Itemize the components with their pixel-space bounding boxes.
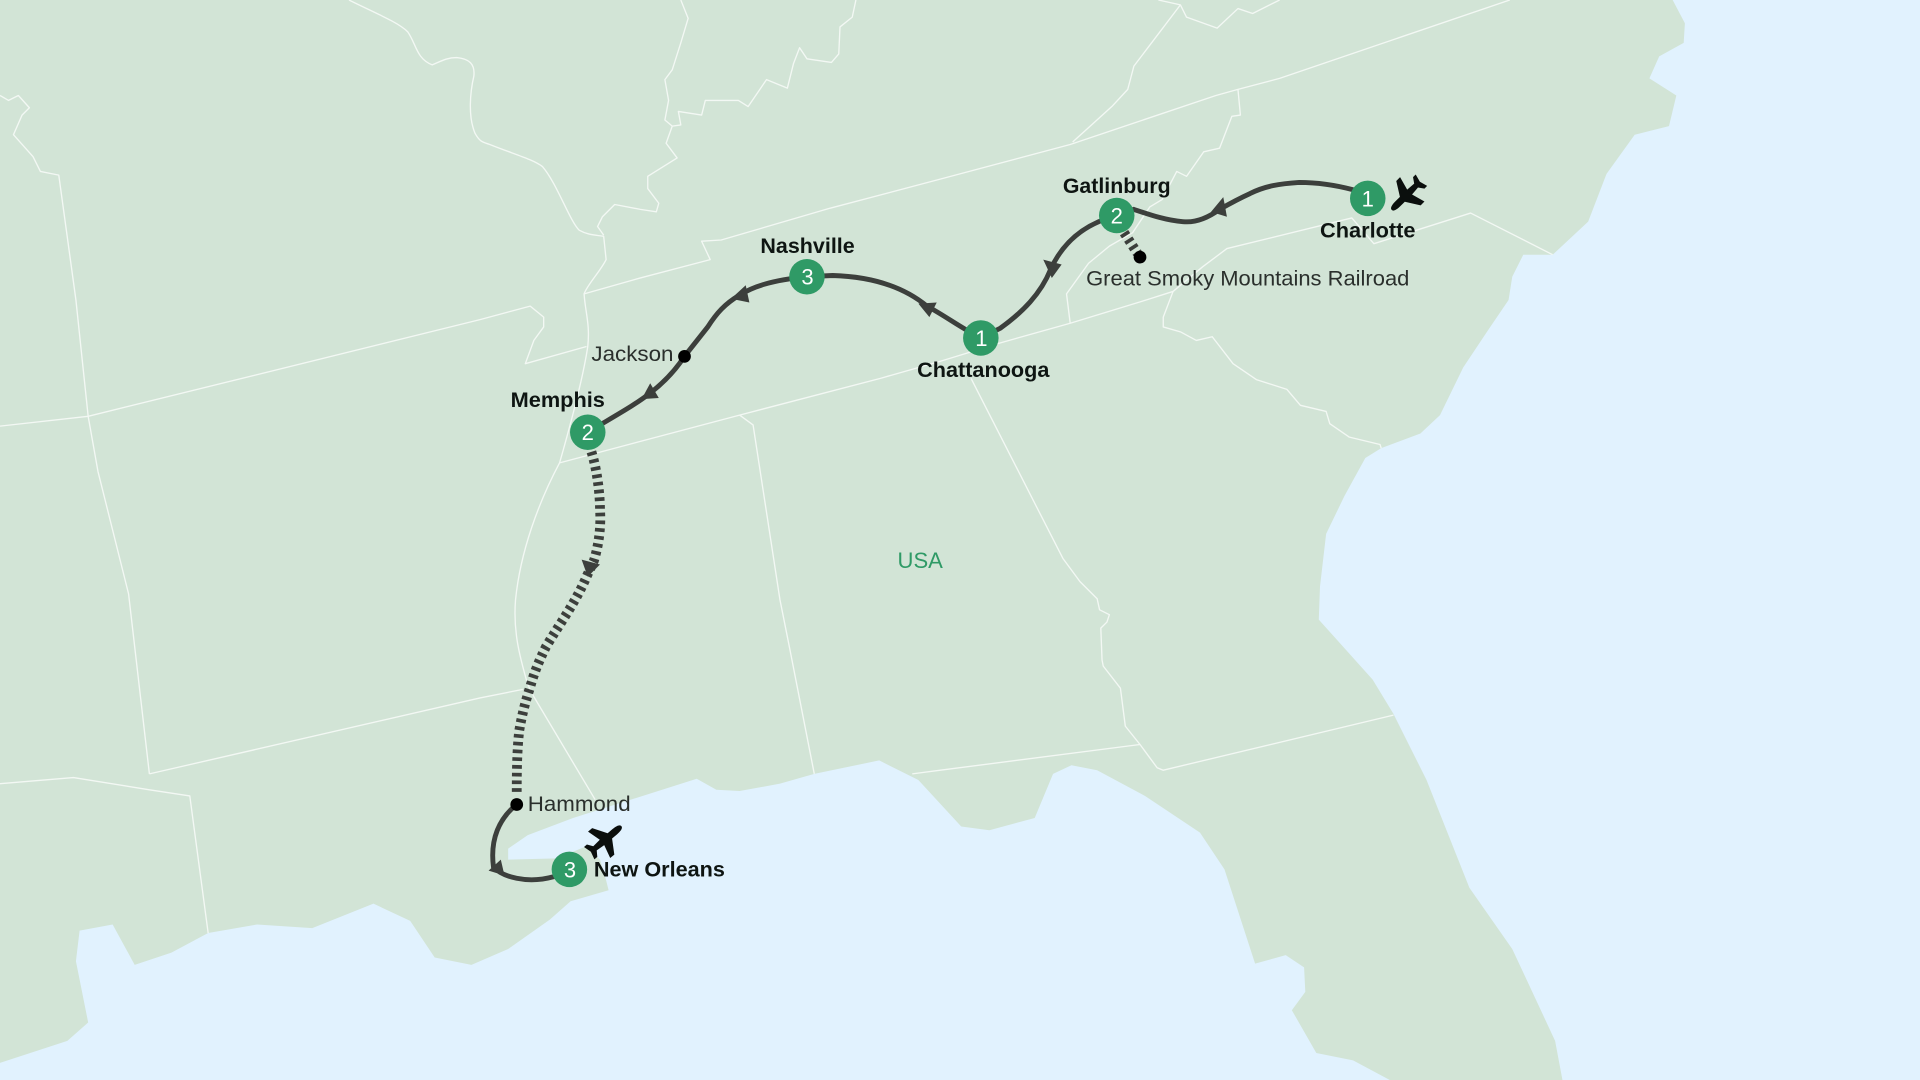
- label: Memphis: Memphis: [511, 388, 605, 412]
- label: Great Smoky Mountains Railroad: Great Smoky Mountains Railroad: [1086, 266, 1409, 290]
- label: New Orleans: New Orleans: [594, 858, 725, 882]
- stop: Charlotte marker: 1: [1362, 186, 1374, 211]
- stop: New Orleans marker: 3: [564, 857, 576, 882]
- stop: Charlotte marker: [1350, 181, 1386, 216]
- label: Jackson: Jackson: [591, 342, 673, 366]
- label: Chattanooga: Chattanooga: [917, 358, 1050, 382]
- direction arrows: [489, 197, 1227, 876]
- stop: Nashville marker: 3: [801, 265, 814, 290]
- route: rail segments: [517, 233, 1138, 796]
- state borders: [0, 0, 1553, 933]
- icon: plane at Charlotte: [1380, 168, 1434, 222]
- stop: Chattanooga marker: [963, 320, 999, 356]
- point: Great Smoky Mountains Railroad: [1134, 251, 1146, 264]
- stop: Nashville marker: [789, 259, 825, 294]
- stop: Chattanooga marker: 1: [975, 326, 988, 351]
- label: Charlotte: Charlotte: [1320, 219, 1416, 243]
- label: Hammond: Hammond: [528, 792, 631, 816]
- stop: Memphis marker: [570, 414, 606, 450]
- stop: New Orleans marker: [552, 852, 587, 887]
- stop: Gatlinburg marker: [1099, 198, 1134, 233]
- stop: Gatlinburg marker: 2: [1111, 203, 1123, 228]
- icon: plane at New Orleans: [578, 813, 632, 866]
- point: Jackson: [678, 350, 691, 363]
- label: USA: USA: [898, 548, 943, 573]
- point: Hammond: [510, 798, 523, 811]
- route: road segments: [493, 182, 1368, 880]
- label: Gatlinburg: Gatlinburg: [1063, 174, 1171, 198]
- stop: Memphis marker: 2: [582, 420, 594, 445]
- label: Nashville: Nashville: [760, 234, 855, 258]
